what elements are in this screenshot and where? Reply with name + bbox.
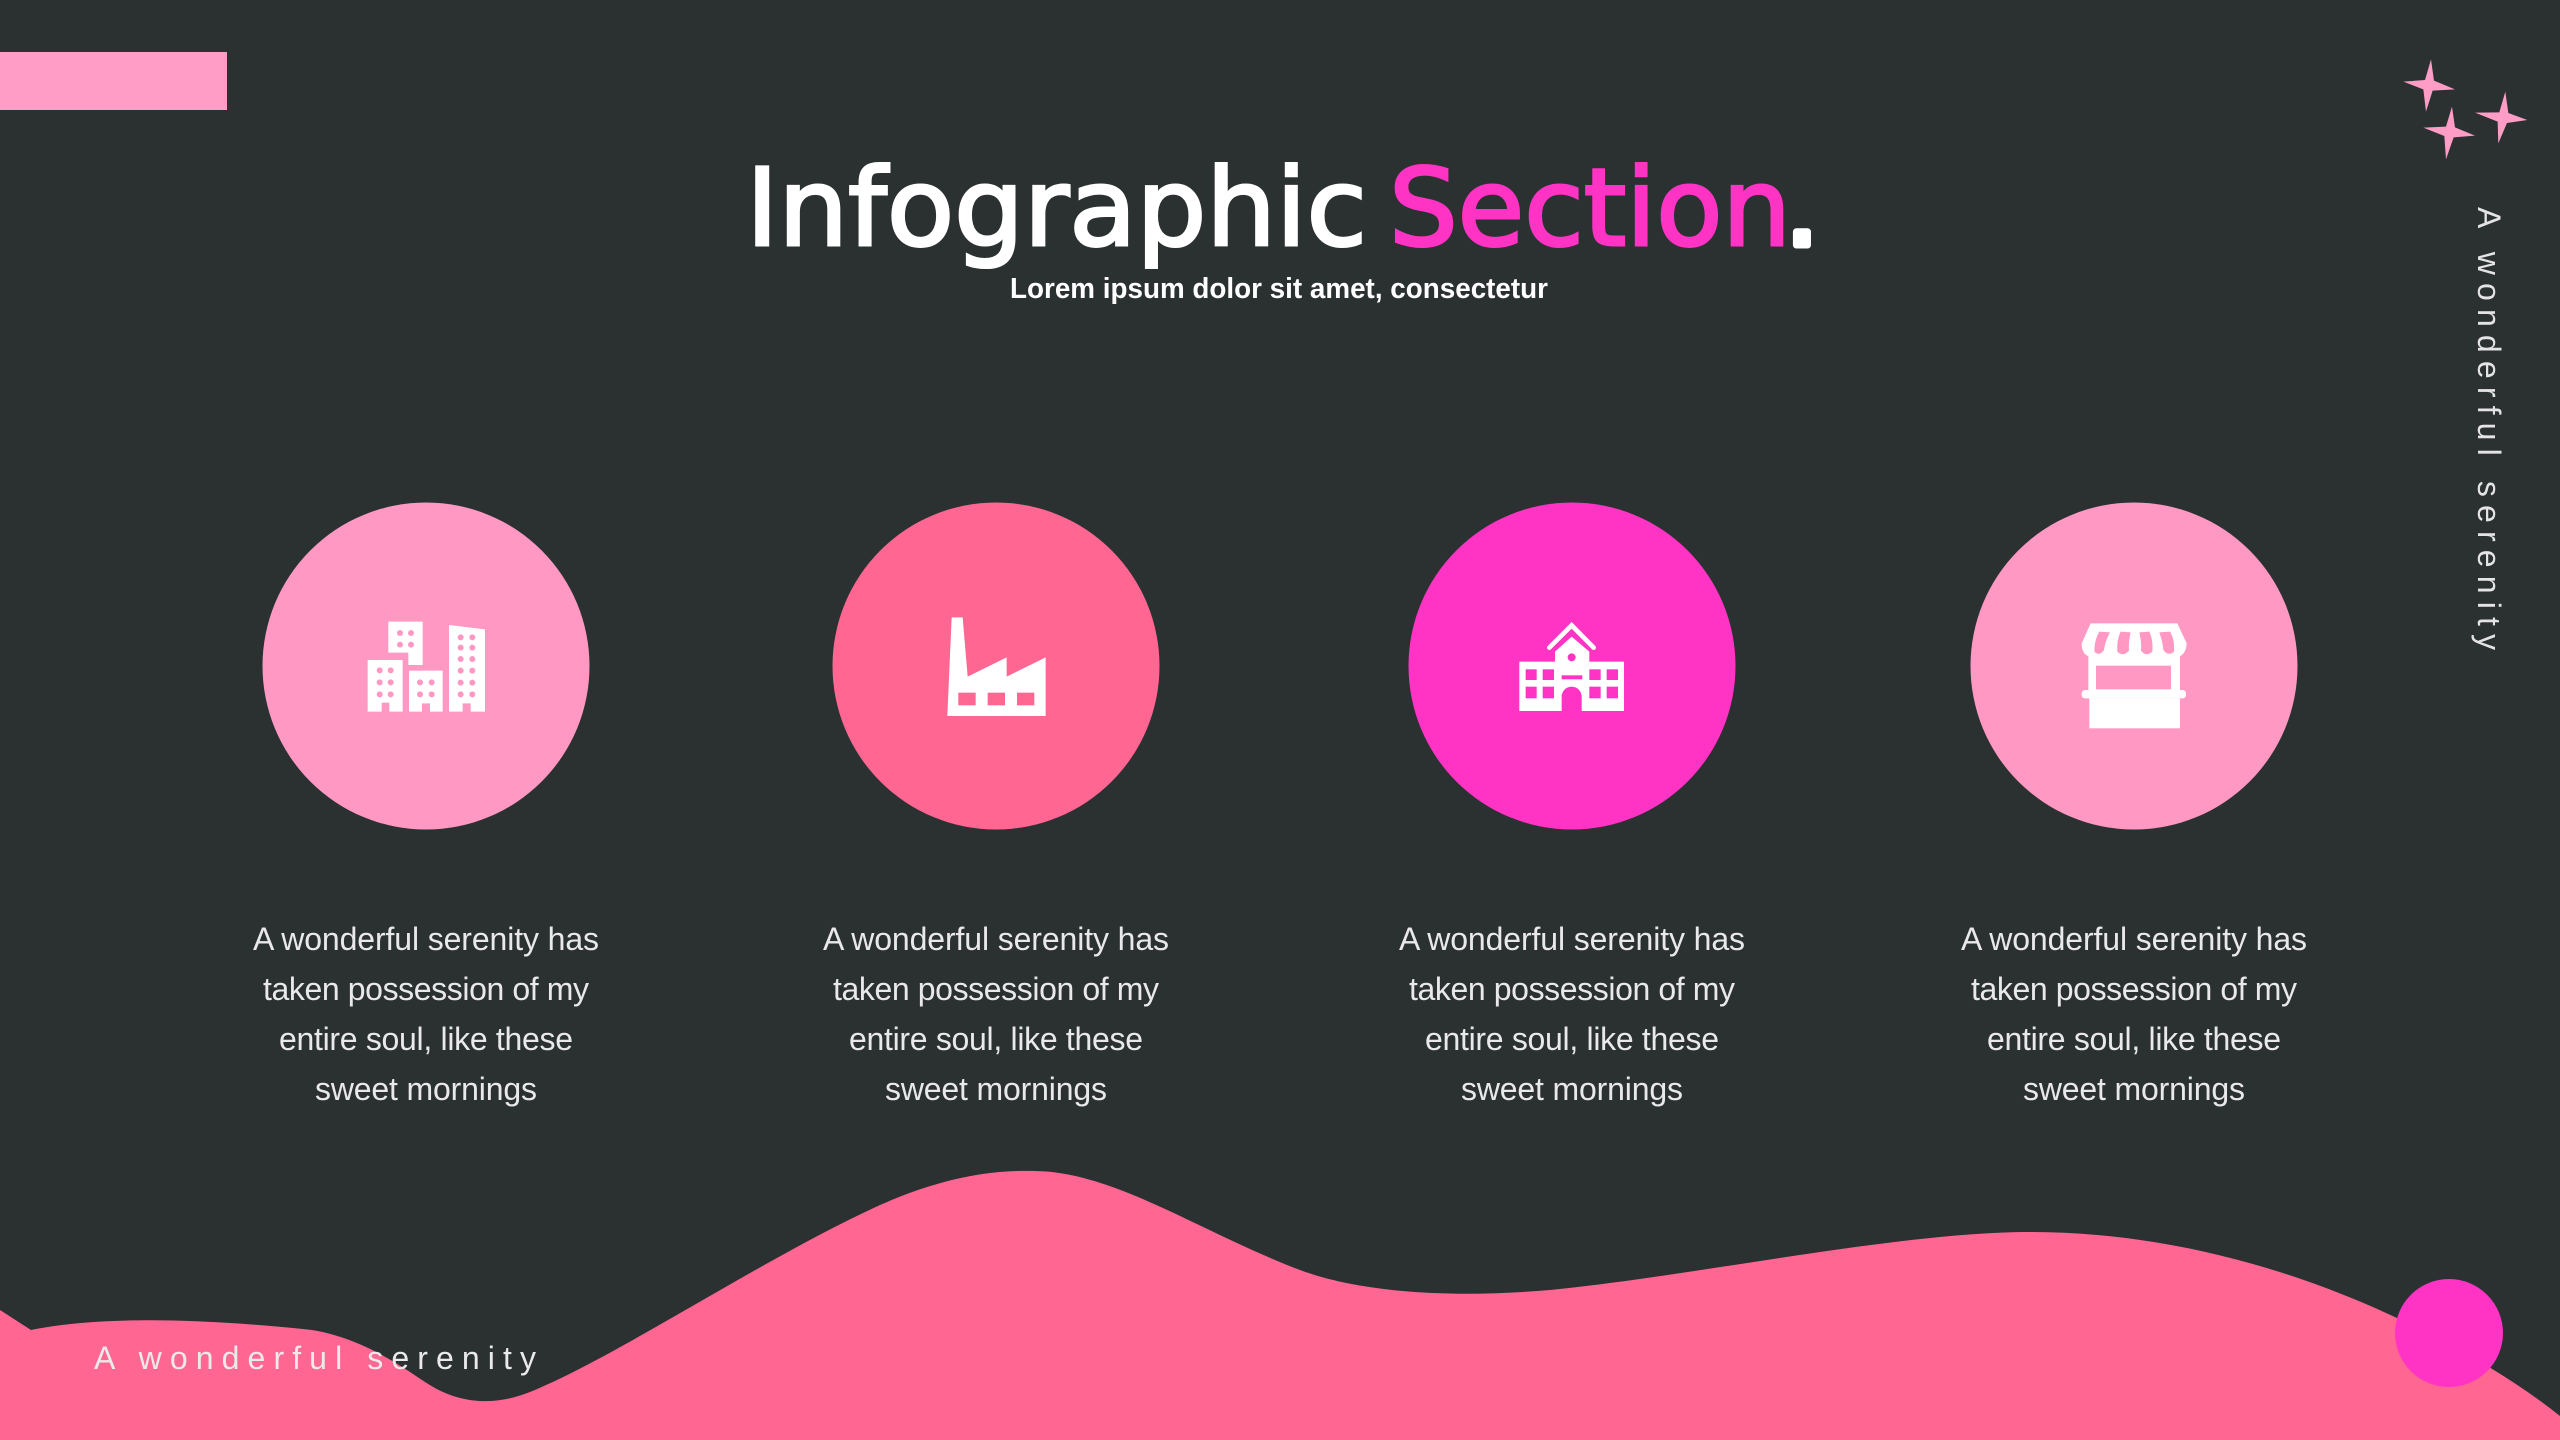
vertical side label: A wonderful serenity — [2471, 207, 2507, 650]
circle: school — [1408, 502, 1736, 830]
text block 1: sweet mornings — [315, 1071, 537, 1107]
text block 4: entire soul, like these — [1987, 1021, 2281, 1057]
text block 4 — [1961, 921, 2307, 1107]
pink wave — [0, 1171, 2560, 1440]
text block 3: entire soul, like these — [1425, 1021, 1719, 1057]
icon: market stall — [2082, 623, 2187, 728]
text block 3 — [1399, 921, 1745, 1107]
text block 4: A wonderful serenity has — [1961, 921, 2307, 957]
icon: sparkles — [2403, 59, 2527, 159]
icon: school — [1519, 625, 1624, 711]
text block 3: taken possession of my — [1409, 971, 1735, 1007]
text block 2: sweet mornings — [885, 1071, 1107, 1107]
title: . — [1785, 147, 1819, 271]
text block 2 — [823, 921, 1169, 1107]
circle: factory — [832, 502, 1160, 830]
circle: buildings — [262, 502, 590, 830]
text block 1: entire soul, like these — [279, 1021, 573, 1057]
footer label: A wonderful serenity — [94, 1340, 536, 1376]
icon: factory — [947, 617, 1046, 716]
circle: market stall — [1970, 502, 2298, 830]
text block 1 — [253, 921, 599, 1107]
text block 2: taken possession of my — [833, 971, 1159, 1007]
text block 3: sweet mornings — [1461, 1071, 1683, 1107]
text block 1: A wonderful serenity has — [253, 921, 599, 957]
text block 4: taken possession of my — [1971, 971, 2297, 1007]
text block 3: A wonderful serenity has — [1399, 921, 1745, 957]
text block 2: A wonderful serenity has — [823, 921, 1169, 957]
magenta dot — [2395, 1279, 2503, 1387]
subtitle: Lorem ipsum dolor sit amet, consectetur — [1010, 273, 1548, 305]
text block 1: taken possession of my — [263, 971, 589, 1007]
title — [746, 147, 1819, 271]
decorative pink tab — [0, 52, 227, 110]
text block 4: sweet mornings — [2023, 1071, 2245, 1107]
title: Section — [1389, 147, 1791, 271]
text block 2: entire soul, like these — [849, 1021, 1143, 1057]
title: Infographic — [746, 147, 1367, 271]
icon: city buildings — [368, 622, 485, 712]
